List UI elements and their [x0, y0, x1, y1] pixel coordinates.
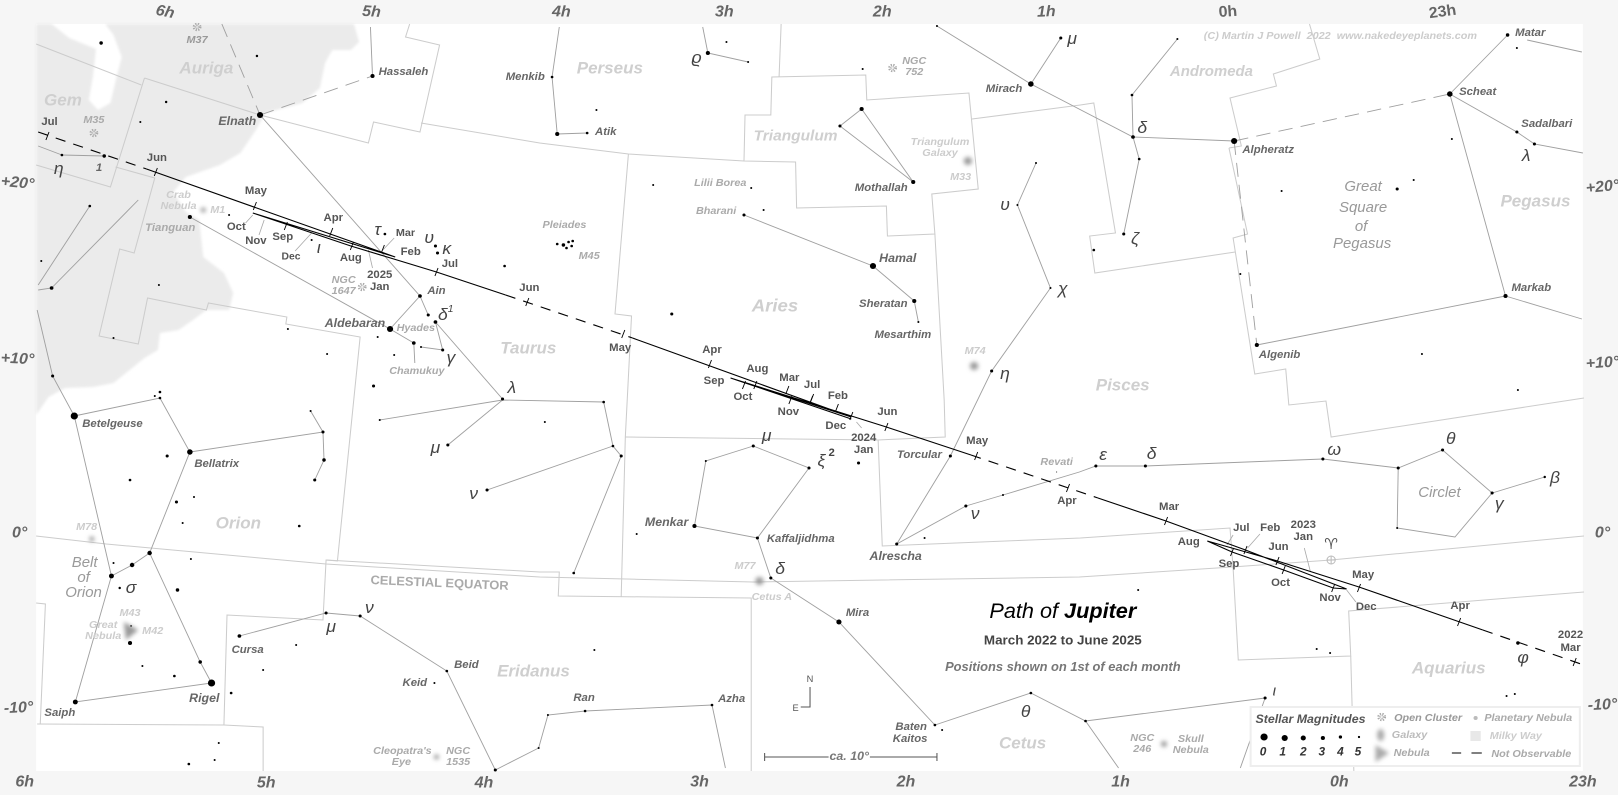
constellation names: Triangulum	[754, 128, 838, 144]
vernal equinox marker: ♈	[1324, 535, 1338, 553]
month labels: Jan	[1294, 531, 1313, 543]
faint nebula labels: M77	[734, 560, 757, 572]
month labels: Jul	[442, 258, 458, 270]
right ascension labels, bottom: 23h	[1568, 774, 1597, 790]
Greek star letters: 2	[829, 447, 835, 459]
deep-sky object labels: NGC	[446, 745, 470, 757]
star names: Elnath	[218, 114, 256, 128]
month labels: Jun	[147, 152, 167, 164]
star names: Scheat	[1459, 86, 1498, 98]
faint nebula labels: M33	[950, 171, 971, 183]
star names: Mirach	[986, 83, 1022, 95]
Greek star letters: ν	[469, 483, 478, 503]
star names: Mothallah	[855, 182, 908, 194]
star names: Algenib	[1258, 349, 1300, 361]
right ascension labels, bottom	[15, 774, 1597, 791]
legend: Nebula	[1394, 747, 1430, 759]
Greek star letters: υ	[1000, 194, 1010, 214]
scale bar	[765, 749, 937, 763]
right ascension labels, bottom: 0h	[1330, 774, 1349, 790]
deep-sky object labels: Chamukuy	[389, 365, 446, 377]
Greek star letters: 1	[448, 304, 454, 314]
right ascension labels, top: 23h	[1428, 2, 1457, 22]
star names: Mira	[846, 607, 869, 619]
asterism labels: Circlet	[1418, 485, 1462, 501]
month labels: Jul	[1233, 522, 1250, 534]
star names: Kaitos	[893, 733, 927, 745]
legend: Not Observable	[1491, 748, 1571, 760]
faint nebula labels: Galaxy	[922, 147, 959, 159]
declination labels: -10°	[3, 699, 34, 717]
constellation names: Eridanus	[497, 662, 570, 680]
asterism labels: Belt	[72, 555, 98, 571]
deep-sky object labels: Bharani	[696, 205, 737, 217]
month labels: May	[966, 435, 989, 447]
Greek star letters: λ	[1521, 145, 1530, 165]
star names: Hassaleh	[379, 66, 429, 78]
star names: Alrescha	[869, 549, 922, 563]
faint nebula labels: Crab	[166, 189, 191, 201]
faint nebula labels: M1	[210, 204, 225, 216]
faint nebula labels	[76, 30, 1478, 642]
Greek star letters: δ	[775, 558, 785, 578]
faint nebula labels: Triangulum	[911, 136, 970, 148]
title: Path of Jupiter	[989, 599, 1138, 623]
month labels: Apr	[324, 212, 344, 224]
deep-sky object labels: Revati	[1040, 456, 1074, 468]
faint nebula labels: M43	[119, 607, 141, 619]
constellation names: Aries	[751, 295, 798, 315]
Greek star letters: δ	[1137, 117, 1148, 137]
right ascension labels, top: 4h	[551, 3, 571, 21]
right ascension labels, bottom: 6h	[15, 774, 34, 790]
Greek star letters: ι	[317, 237, 321, 257]
constellation names: Pisces	[1096, 376, 1150, 394]
constellation names: Orion	[216, 514, 261, 532]
star names: Rigel	[189, 691, 220, 705]
star names: Matar	[1515, 27, 1546, 39]
star names: Aldebaran	[324, 316, 385, 330]
month labels: Mar	[1159, 501, 1180, 513]
Milky Way band	[36, 24, 359, 415]
month labels: Apr	[1450, 600, 1471, 612]
month labels: Aug	[1178, 536, 1200, 548]
Greek star letters: φ	[1517, 647, 1529, 667]
declination labels: 0°	[1595, 525, 1611, 541]
star names: Azha	[717, 693, 745, 705]
constellation names: Gem	[44, 91, 82, 109]
constellation names: Aquarius	[1411, 659, 1486, 677]
star names: Alpheratz	[1241, 144, 1294, 156]
right ascension labels, top: 5h	[362, 3, 381, 21]
Greek star letters: ξ	[817, 450, 827, 470]
star names: Betelgeuse	[82, 418, 143, 430]
deep-sky object labels: NGC	[902, 55, 927, 67]
month labels: Dec	[282, 252, 301, 262]
constellation names: Pegasus	[1500, 192, 1570, 210]
deep-sky object labels	[83, 34, 1209, 768]
month labels: Jun	[519, 282, 540, 294]
month labels: Nov	[778, 406, 800, 418]
month labels: Oct	[1271, 577, 1290, 589]
celestial equator label: CELESTIAL EQUATOR	[370, 573, 509, 593]
right ascension labels, bottom: 1h	[1111, 774, 1130, 790]
month labels: Jun	[877, 406, 898, 418]
month labels: 2023	[1291, 519, 1316, 531]
Greek star letters: ν	[365, 597, 374, 617]
compass	[792, 674, 813, 713]
star names: Ran	[573, 692, 595, 704]
faint nebula labels: (C) Martin J Powell 2022 www.nakedeyeplanets.com	[1204, 30, 1478, 42]
legend: 4	[1336, 746, 1344, 758]
Greek star letters: μ	[430, 437, 441, 457]
Greek star letters: δ	[438, 304, 448, 324]
month labels: Jul	[804, 379, 820, 391]
right ascension labels, bottom: 3h	[690, 774, 709, 790]
star names: Menkar	[645, 515, 690, 529]
month labels: Oct	[227, 221, 246, 233]
right ascension labels, top: 1h	[1037, 3, 1056, 21]
month labels: 2022	[1558, 629, 1583, 641]
star names: Bellatrix	[194, 458, 240, 470]
star names: Sheratan	[859, 298, 908, 310]
open clusters	[91, 24, 895, 290]
Greek star letters: μ	[1066, 28, 1077, 48]
Greek star letters: λ	[506, 377, 516, 397]
Greek star letters: υ	[424, 227, 434, 247]
star names: Atik	[594, 126, 617, 138]
faint nebula labels: Cetus A	[752, 591, 792, 603]
Greek star letters: σ	[126, 577, 137, 597]
faint nebula labels: Great	[89, 619, 118, 631]
deep-sky object labels: Nebula	[1173, 744, 1209, 756]
vernal equinox marker	[1324, 535, 1338, 564]
legend: Milky Way	[1490, 730, 1543, 742]
declination labels: +20°	[0, 173, 36, 193]
month labels: Apr	[702, 344, 722, 356]
Greek star letters: μ	[761, 425, 772, 445]
Greek star letters: ω	[1327, 439, 1341, 459]
month labels: Mar	[1560, 642, 1581, 654]
right ascension labels, bottom: 2h	[896, 774, 915, 790]
month labels: Feb	[401, 246, 421, 258]
right ascension labels, top: 0h	[1218, 3, 1238, 21]
legend: 1	[1279, 746, 1286, 758]
faint nebula labels: M74	[965, 345, 986, 357]
month labels: Jul	[41, 116, 58, 128]
constellation names: Auriga	[178, 59, 233, 77]
month labels: 2025	[367, 269, 392, 281]
star names: Keid	[403, 677, 427, 689]
Greek star letters: ν	[971, 503, 980, 523]
Greek star letters: τ	[374, 219, 383, 239]
Greek star letters: χ	[1056, 278, 1068, 298]
Greek star letters: κ	[442, 238, 453, 258]
month labels: Nov	[1319, 592, 1342, 604]
month labels: Mar	[396, 227, 415, 239]
month labels: 2024	[851, 432, 877, 444]
month labels: Oct	[734, 391, 753, 403]
legend: 5	[1355, 746, 1362, 758]
Greek star letters: η	[1000, 363, 1010, 383]
asterism labels: Orion	[65, 585, 102, 601]
right ascension labels, top: 2h	[872, 4, 892, 20]
scale bar: ca. 10°	[830, 749, 869, 763]
Greek star letters: ε	[1099, 444, 1107, 464]
right ascension labels, top: 3h	[715, 4, 734, 20]
month labels: Aug	[340, 252, 362, 264]
month labels: Nov	[245, 235, 267, 247]
Greek star letters: θ	[1446, 428, 1456, 448]
star names: 1	[96, 162, 102, 174]
star names: Torcular	[897, 449, 943, 461]
Greek star letters: μ	[325, 616, 337, 636]
month labels: Mar	[779, 372, 800, 384]
compass: E	[792, 703, 799, 713]
constellation names: Andromeda	[1169, 64, 1253, 80]
faint nebula labels: M42	[142, 625, 163, 637]
constellation names: Perseus	[577, 59, 643, 77]
constellation names: Taurus	[500, 339, 556, 357]
asterism labels: of	[77, 570, 92, 586]
month labels	[41, 116, 1583, 654]
Greek star letters: ι	[1273, 683, 1277, 699]
declination labels: 0°	[12, 525, 28, 541]
legend	[1251, 707, 1580, 766]
star names: Mesarthim	[875, 329, 931, 341]
asterism labels: Pegasus	[1333, 236, 1392, 252]
Greek star letters: ϱ	[691, 47, 702, 67]
deep-sky object labels: NGC	[1130, 732, 1155, 744]
legend: Galaxy	[1392, 729, 1428, 741]
month labels: Sep	[1219, 558, 1240, 570]
celestial equator line	[36, 536, 1584, 582]
deep-sky object labels: Eye	[392, 756, 411, 768]
month labels: Sep	[272, 231, 293, 243]
star names: Sadalbari	[1521, 118, 1573, 130]
compass: N	[807, 674, 813, 684]
deep-sky object labels: 1647	[332, 285, 357, 297]
deep-sky object labels: M37	[187, 34, 209, 46]
deep-sky object labels: Cleopatra's	[373, 745, 432, 757]
declination labels: -10°	[1587, 696, 1618, 714]
month labels: Aug	[746, 363, 769, 375]
legend: Stellar Magnitudes	[1255, 712, 1366, 726]
star names: Kaffaljidhma	[767, 533, 835, 545]
faint nebula labels: Nebula	[160, 200, 197, 212]
faint nebula labels: M78	[76, 521, 97, 533]
subtitle: March 2022 to June 2025	[984, 633, 1142, 647]
right ascension labels, top: 6h	[154, 2, 176, 22]
Greek star letters: θ	[1021, 701, 1031, 721]
Greek star letters: δ	[1147, 443, 1157, 463]
month labels: Feb	[828, 390, 848, 402]
deep-sky object labels: NGC	[332, 274, 356, 286]
month labels: May	[609, 342, 632, 354]
deep-sky object labels: Lilii Borea	[694, 177, 746, 189]
asterism labels	[65, 179, 1462, 601]
deep-sky object labels: M35	[83, 114, 106, 126]
month labels: May	[245, 185, 268, 197]
star names: Ain	[426, 285, 446, 297]
month labels: Feb	[1260, 522, 1281, 534]
star names: Baten	[895, 721, 927, 733]
month labels: Jan	[370, 281, 390, 293]
deep-sky object labels: Skull	[1178, 733, 1205, 745]
month labels: Dec	[1356, 601, 1377, 613]
galaxies and nebulae	[89, 157, 1167, 760]
legend: Open Cluster	[1394, 712, 1463, 724]
asterism labels: Great	[1344, 179, 1383, 195]
month labels: Jun	[1268, 541, 1289, 553]
faint nebula labels: Nebula	[85, 630, 121, 642]
star names: Markab	[1511, 282, 1551, 294]
declination labels: +10°	[0, 350, 35, 368]
month labels: Jan	[854, 444, 874, 456]
Greek star letters: ζ	[1131, 228, 1140, 248]
right ascension labels, bottom: 5h	[257, 775, 276, 791]
Greek star letters: γ	[1495, 493, 1505, 513]
star names: Menkib	[506, 71, 545, 83]
star names: Cursa	[232, 644, 264, 656]
constellation names: Cetus	[999, 734, 1046, 752]
deep-sky object labels: 1535	[446, 756, 471, 768]
star names: Hamal	[879, 251, 917, 265]
Greek star letters: β	[1549, 467, 1560, 487]
asterism labels: of	[1355, 219, 1369, 235]
note on positions: Positions shown on 1st of each month	[945, 660, 1181, 674]
deep-sky object labels: Tianguan	[145, 222, 196, 234]
deep-sky object labels: 752	[905, 66, 923, 78]
deep-sky object labels: M45	[579, 250, 601, 262]
declination labels	[0, 173, 1618, 717]
right ascension labels, top	[154, 2, 1457, 22]
asterism labels: Square	[1339, 200, 1387, 216]
month labels: May	[1352, 569, 1375, 581]
deep-sky object labels: 246	[1132, 743, 1151, 755]
leader lines for month labels	[246, 215, 1356, 602]
legend: 3	[1319, 746, 1326, 758]
right ascension labels, bottom: 4h	[474, 775, 493, 791]
legend: Planetary Nebula	[1484, 712, 1572, 724]
legend: 2	[1299, 746, 1307, 758]
month labels: Dec	[825, 420, 846, 432]
legend: 0	[1260, 746, 1267, 758]
deep-sky object labels: Pleiades	[542, 219, 586, 231]
month labels: Sep	[704, 375, 725, 387]
deep-sky object labels: Hyades	[397, 322, 435, 334]
Jupiter path	[38, 132, 1581, 666]
star names: Saiph	[44, 707, 75, 719]
star names: Beid	[454, 659, 479, 671]
Greek star letters: η	[54, 158, 64, 178]
Greek star letters: γ	[447, 347, 457, 367]
month labels: Apr	[1057, 495, 1077, 507]
